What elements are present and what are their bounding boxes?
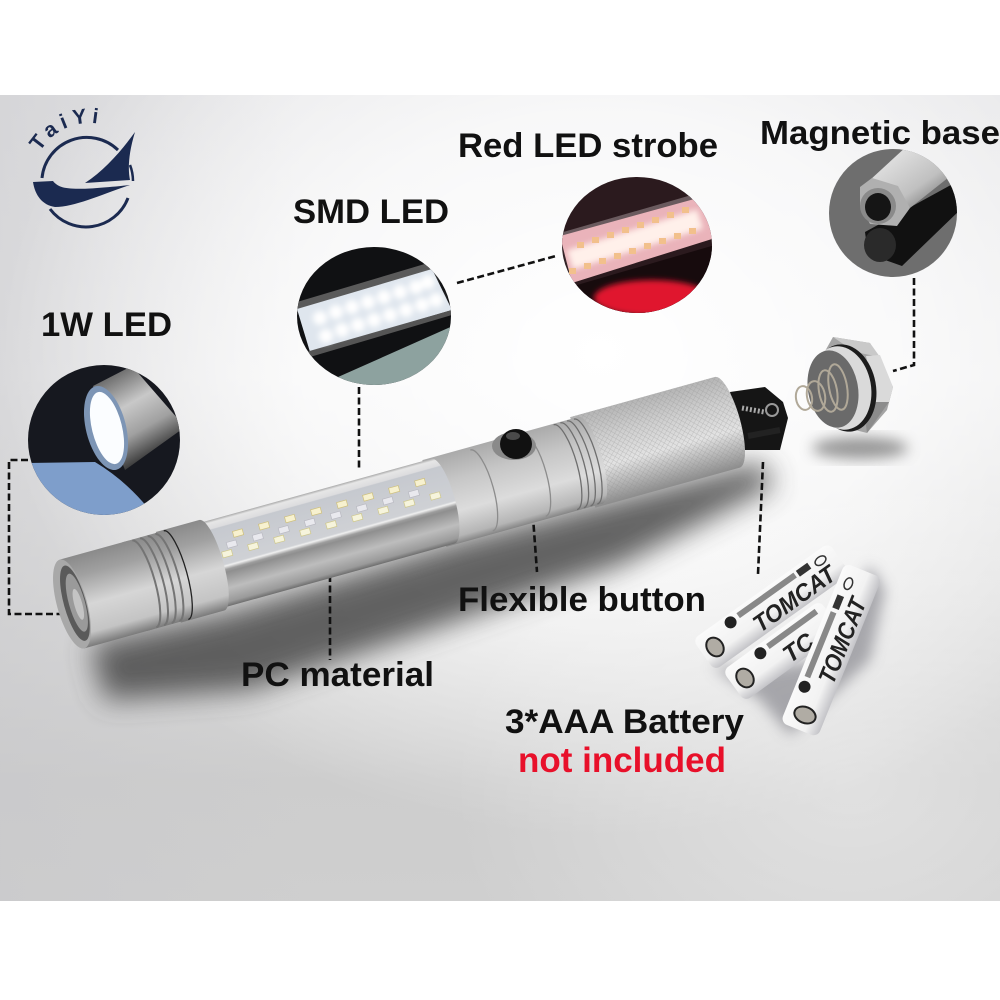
label: Red LED strobe: Red LED strobe [458,127,718,165]
logo: TaiYi: TaiYi [28,108,98,148]
magnetic end cap [802,337,893,437]
head [45,538,163,652]
label: 3*AAA Battery: 3*AAA Battery [505,703,744,741]
battery 1 [693,543,852,672]
battery 3 [780,563,883,738]
label: 1W LED: 1W LED [41,306,172,344]
knurled handle [570,374,752,508]
battery 2 [723,600,843,703]
spring [794,363,851,413]
label: not included: not included [518,741,726,780]
tail collar [156,517,236,623]
clear PC tube with SMD LEDs [190,456,466,610]
callout dashes [9,256,914,660]
end cap shadow [812,437,908,459]
label: PC material: PC material [241,656,434,694]
logo: TaiYi [28,108,135,228]
circle: red LED strobe detail [560,175,715,316]
label: Magnetic base: Magnetic base [760,114,1000,151]
battery holder [730,387,788,450]
battery 1: TOMCAT [748,560,843,638]
battery shadows [710,565,885,735]
button [492,429,536,460]
label: Flexible button: Flexible button [458,581,706,619]
circle: SMD LED detail [295,245,455,390]
flashlight shadow [90,462,775,700]
switch collar [422,414,614,547]
threads [122,528,199,631]
circle: 1W LED detail [28,365,180,515]
flashlight body [45,374,752,653]
circle: magnetic base detail [828,146,960,278]
battery 3: TOMCAT [814,592,873,688]
label: SMD LED: SMD LED [293,193,449,231]
battery 2: TC [778,627,820,669]
